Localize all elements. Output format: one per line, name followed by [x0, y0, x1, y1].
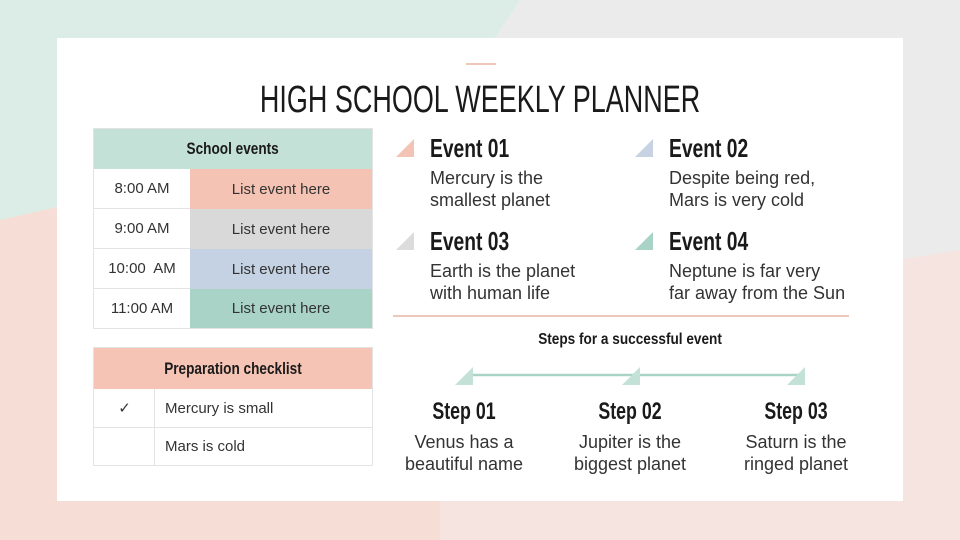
event 02: Despite being red,	[669, 168, 815, 188]
event 02	[635, 133, 815, 210]
white panel	[57, 38, 903, 501]
event 03: Event 03	[430, 226, 509, 256]
step 03: Saturn is the	[745, 432, 847, 452]
event 04: Event 04	[669, 226, 748, 256]
steps heading: Steps for a successful event	[538, 331, 722, 348]
event 01: Mercury is the	[430, 168, 543, 188]
step 03: ringed planet	[744, 454, 848, 474]
header: preparation checklist	[94, 348, 372, 389]
step 02	[574, 398, 686, 474]
step 01: beautiful name	[405, 454, 523, 474]
step 02: Jupiter is the	[579, 432, 681, 452]
event 03: Earth is the planet	[430, 261, 575, 281]
table: school events: List event here	[232, 300, 330, 317]
table: school events: 9:00 AM	[114, 220, 170, 237]
event 01: smallest planet	[430, 190, 550, 210]
step 01	[405, 398, 523, 474]
step 03	[744, 398, 848, 474]
table: school events: List event here	[232, 180, 330, 198]
event 03	[396, 226, 575, 303]
divider	[393, 315, 849, 317]
table: school events: 8:00 AM	[114, 180, 170, 197]
table: preparation checklist	[93, 347, 373, 466]
table: preparation checklist: ✓	[118, 400, 131, 417]
event 04: far away from the Sun	[669, 283, 845, 303]
accent line	[466, 63, 496, 65]
table: preparation checklist: Mars is cold	[165, 438, 245, 455]
table: school events: List event here	[232, 260, 330, 278]
step 01: Venus has a	[414, 432, 514, 452]
event 04: Neptune is far very	[669, 261, 820, 281]
event 01: Event 01	[430, 133, 509, 163]
step 01: Step 01	[432, 398, 496, 425]
header: school events	[94, 129, 372, 169]
step 02: biggest planet	[574, 454, 686, 474]
step 02: Step 02	[598, 398, 662, 425]
event 02: Event 02	[669, 133, 748, 163]
timeline	[455, 367, 805, 385]
header: school events: School events	[187, 139, 279, 158]
table: school events: 11:00 AM	[111, 300, 173, 317]
step 03: Step 03	[764, 398, 828, 425]
event 01	[396, 133, 550, 210]
event 03: with human life	[430, 283, 550, 303]
table: school events	[93, 128, 373, 329]
table: school events: List event here	[232, 220, 330, 238]
event 04	[635, 226, 845, 303]
header: preparation checklist: Preparation checklist	[164, 358, 302, 378]
title: HIGH SCHOOL WEEKLY PLANNER	[260, 79, 700, 121]
event 02: Mars is very cold	[669, 190, 804, 210]
table: preparation checklist: Mercury is small	[165, 400, 273, 416]
table: school events: 10:00 AM	[108, 260, 176, 277]
